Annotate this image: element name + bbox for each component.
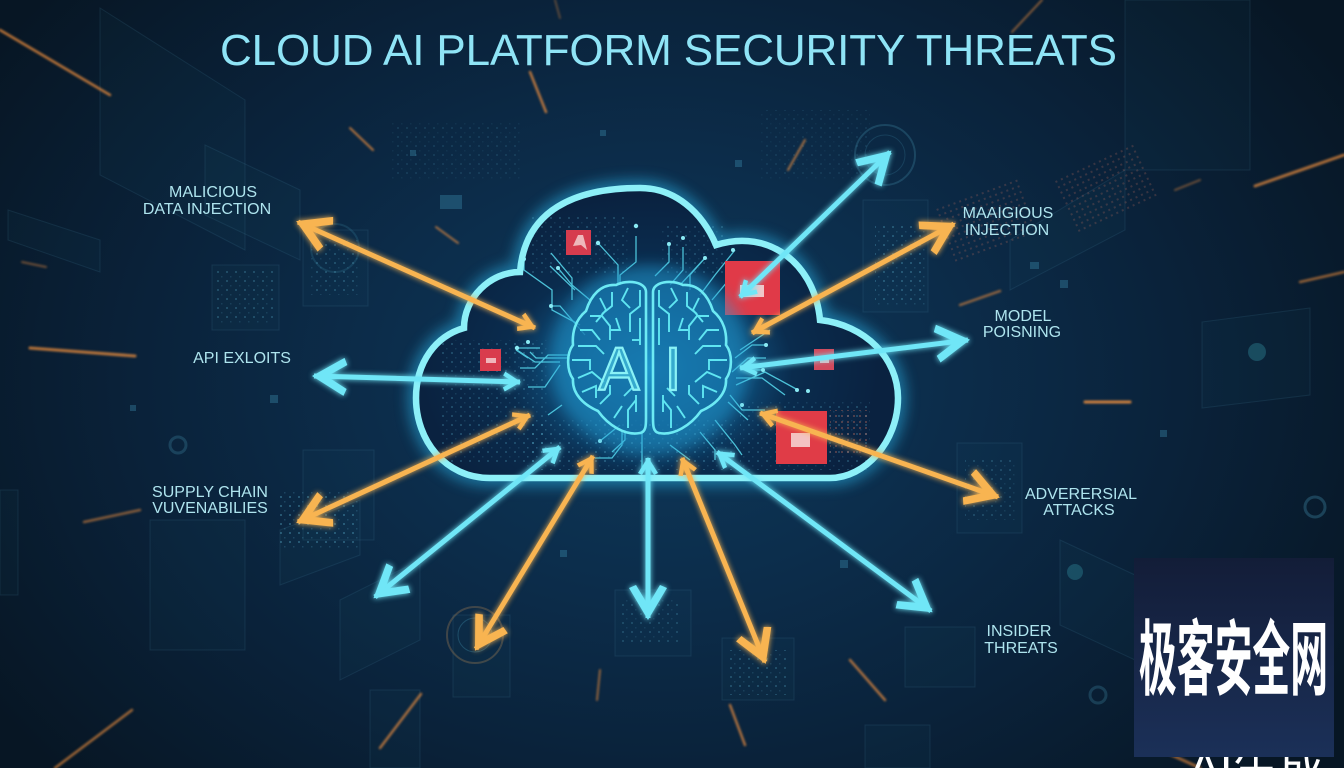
cloud: bright outline [416,188,898,478]
label: insider threats: THREATS [984,640,1058,657]
cloud: circuit texture [440,215,870,470]
cloud: outer glow [416,188,898,478]
arrow: malicious data injection [298,222,535,328]
brain: right hemisphere [653,282,731,433]
label: adversarial attacks: ADVERERSIAL [1025,486,1137,503]
brain: AI letters: AI [599,335,681,403]
label: model poisoning: POISNING [983,324,1061,341]
arrow: model poisoning [740,340,968,368]
threat square: lower right [776,411,827,464]
label: malicious data injection: DATA INJECTION [143,201,271,218]
arrow: malicious injection [752,224,954,333]
watermark: site name: 极客安全网 [1139,594,1328,712]
threat square: left [480,349,501,371]
red threat squares [480,230,834,464]
threat square: right [814,349,834,370]
arrow: insider threats [717,452,931,611]
cloud: dark interior [416,188,898,478]
title: CLOUD AI PLATFORM SECURITY THREATS [220,26,1117,75]
label: malicious data injection: MALICIOUS [169,184,257,201]
label: supply chain: SUPPLY CHAIN [152,484,268,501]
label: API exploits: API EXLOITS [193,350,291,367]
threat square: upper right [725,261,780,315]
watermark: panel [1134,558,1334,757]
label: supply chain: VUVENABILIES [152,500,268,517]
arrow: supply chain [298,415,530,522]
label: malicious injection: INJECTION [965,222,1049,239]
brain [550,265,750,455]
arrow: top right cyan [740,152,890,297]
arrow: adversarial attacks [760,413,998,497]
label: adversarial attacks: ATTACKS [1043,502,1115,519]
arrows [298,152,998,662]
arrow: bottom orange [682,458,765,662]
brain: left hemisphere [568,282,646,433]
arrow: API exploits [314,376,520,382]
label: malicious injection: MAAIGIOUS [963,205,1053,222]
threat square: top left [566,230,591,255]
label: model poisoning: MODEL [995,308,1052,325]
label: insider threats: INSIDER [987,623,1051,640]
arrow: bottom cyan [646,458,650,618]
arrow: lower left cyan [375,447,560,597]
arrow: lower left orange [476,456,593,649]
